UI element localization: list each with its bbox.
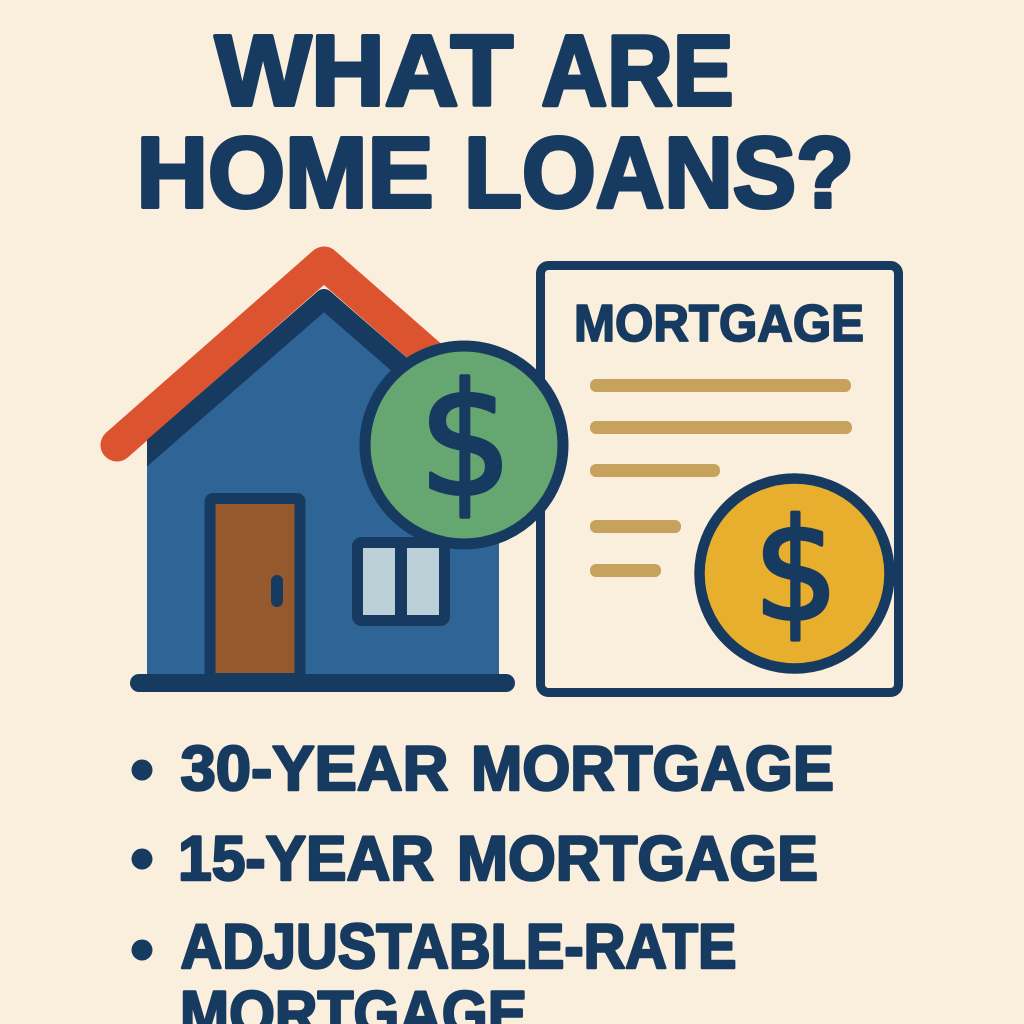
icon: yellow dollar coin: $ (754, 490, 838, 653)
window (358, 542, 444, 620)
list item: 30-year mortgage: 30-YEAR (180, 734, 448, 804)
list item: adjustable-rate mortgage (132, 912, 736, 1024)
list item: 15-year mortgage (132, 824, 818, 894)
icon: green dollar coin: $ (419, 350, 512, 531)
title: HOME (136, 117, 434, 229)
icon: yellow dollar coin (700, 478, 890, 668)
list item: 30-year mortgage: MORTGAGE (471, 734, 834, 804)
house body (147, 299, 499, 676)
house roof (117, 263, 445, 445)
document heading: MORTGAGE (574, 295, 864, 353)
bullet list (132, 734, 834, 1024)
icon: green dollar coin (365, 346, 563, 544)
panel: mortgage document (540, 266, 898, 692)
document text lines (590, 379, 852, 577)
door (210, 498, 300, 678)
roof underside (130, 299, 430, 468)
list item: 15-year mortgage: MORTGAGE (457, 824, 818, 894)
ground line (130, 674, 515, 692)
title: ARE (542, 15, 734, 127)
door handle (271, 575, 283, 607)
title (136, 15, 854, 229)
list item: adjustable-rate mortgage: ADJUSTABLE-RATE (180, 912, 736, 982)
list item: 30-year mortgage (132, 734, 834, 804)
title: LOANS? (464, 117, 854, 229)
title: WHAT (215, 15, 513, 127)
icon: house (117, 263, 515, 692)
list item: 15-year mortgage: 15-YEAR (178, 824, 434, 894)
